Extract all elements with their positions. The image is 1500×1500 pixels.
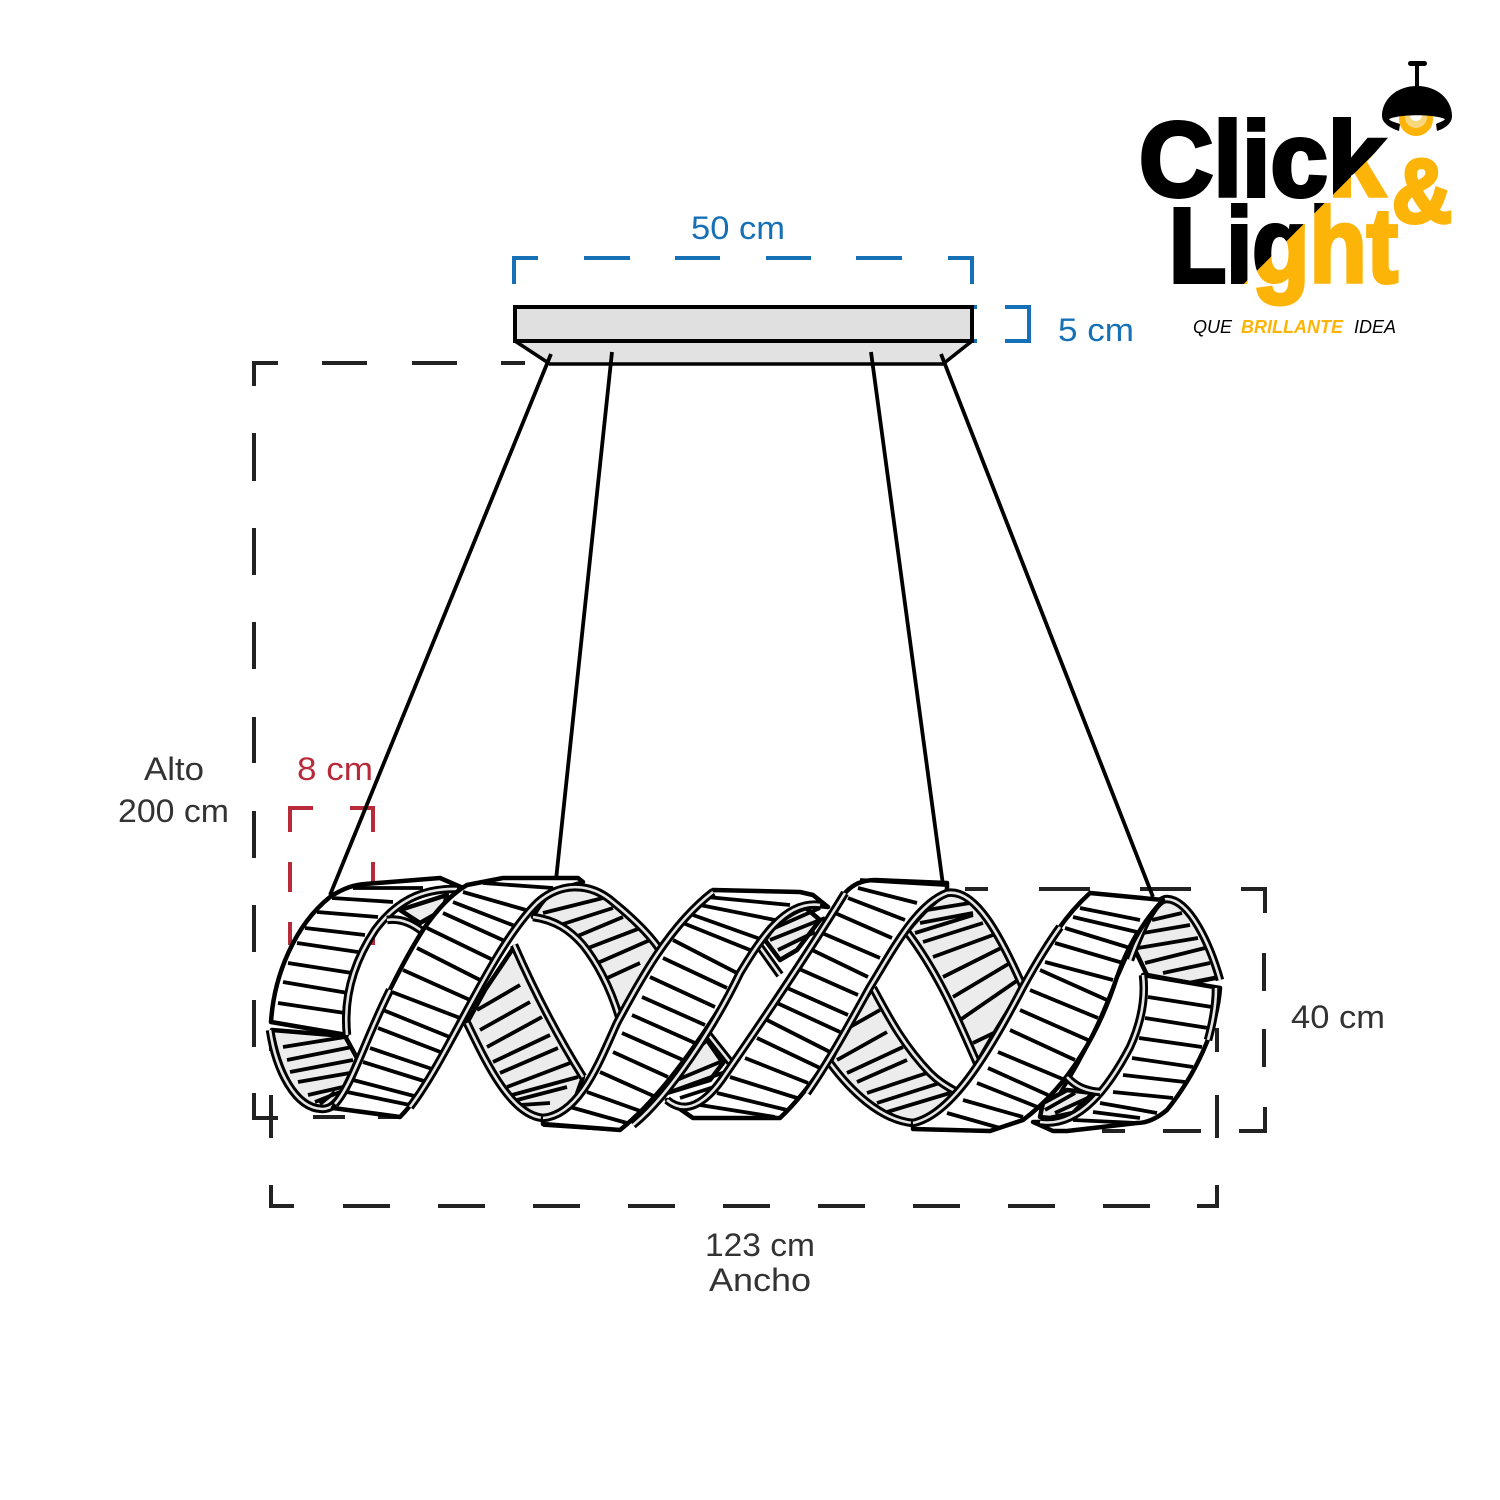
icon: hanging lamp	[1382, 61, 1452, 136]
front band 4	[667, 880, 1023, 1118]
label: Alto: Alto	[144, 751, 204, 787]
dashed dimension: height 200 cm	[254, 363, 525, 1118]
back wedge center lower	[667, 1033, 730, 1098]
back band 3 lower	[467, 945, 583, 1118]
label: Ancho: Ancho	[709, 1262, 811, 1298]
label: 5 cm: 5 cm	[1058, 312, 1134, 348]
front band 5	[913, 893, 1163, 1131]
logo: Click & Light	[1139, 61, 1452, 337]
label: 40 cm: 40 cm	[1291, 999, 1385, 1035]
front band right coil	[1033, 975, 1220, 1131]
label: 123 cm: 123 cm	[705, 1227, 815, 1263]
label: 200 cm: 200 cm	[118, 793, 229, 829]
back wedge lower right	[1040, 1090, 1093, 1118]
label: 8 cm: 8 cm	[297, 751, 373, 787]
logo tagline: QUE BRILLANTE IDEA	[1193, 317, 1396, 337]
front band 3	[543, 890, 828, 1130]
dashed dimension: canopy 5 cm	[972, 307, 1029, 341]
dashed dimension: canopy 50 cm	[514, 258, 972, 284]
back band 2 upper	[533, 888, 660, 1020]
back wedge center upper	[760, 903, 825, 975]
dashed dimension: width 123 cm	[271, 1028, 1217, 1206]
label: 50 cm: 50 cm	[691, 210, 785, 246]
back band left coil	[270, 1030, 357, 1109]
back band 4 upper	[907, 893, 1023, 1063]
suspension cables	[330, 352, 1153, 897]
back band right coil	[1130, 899, 1220, 983]
back band 5 lower	[830, 987, 957, 1123]
logo word: Light: Light	[1169, 187, 1398, 305]
logo ampersand: &	[1392, 142, 1452, 242]
helix ribbon chandelier	[270, 878, 1220, 1131]
logo word: Click: Click	[1139, 101, 1386, 219]
dashed dimension: band 8 cm	[290, 808, 373, 945]
dashed dimension: depth 40 cm	[965, 889, 1265, 1131]
front band 2	[333, 878, 660, 1117]
front band 1 left coil	[271, 878, 463, 1035]
ceiling canopy	[515, 307, 972, 364]
